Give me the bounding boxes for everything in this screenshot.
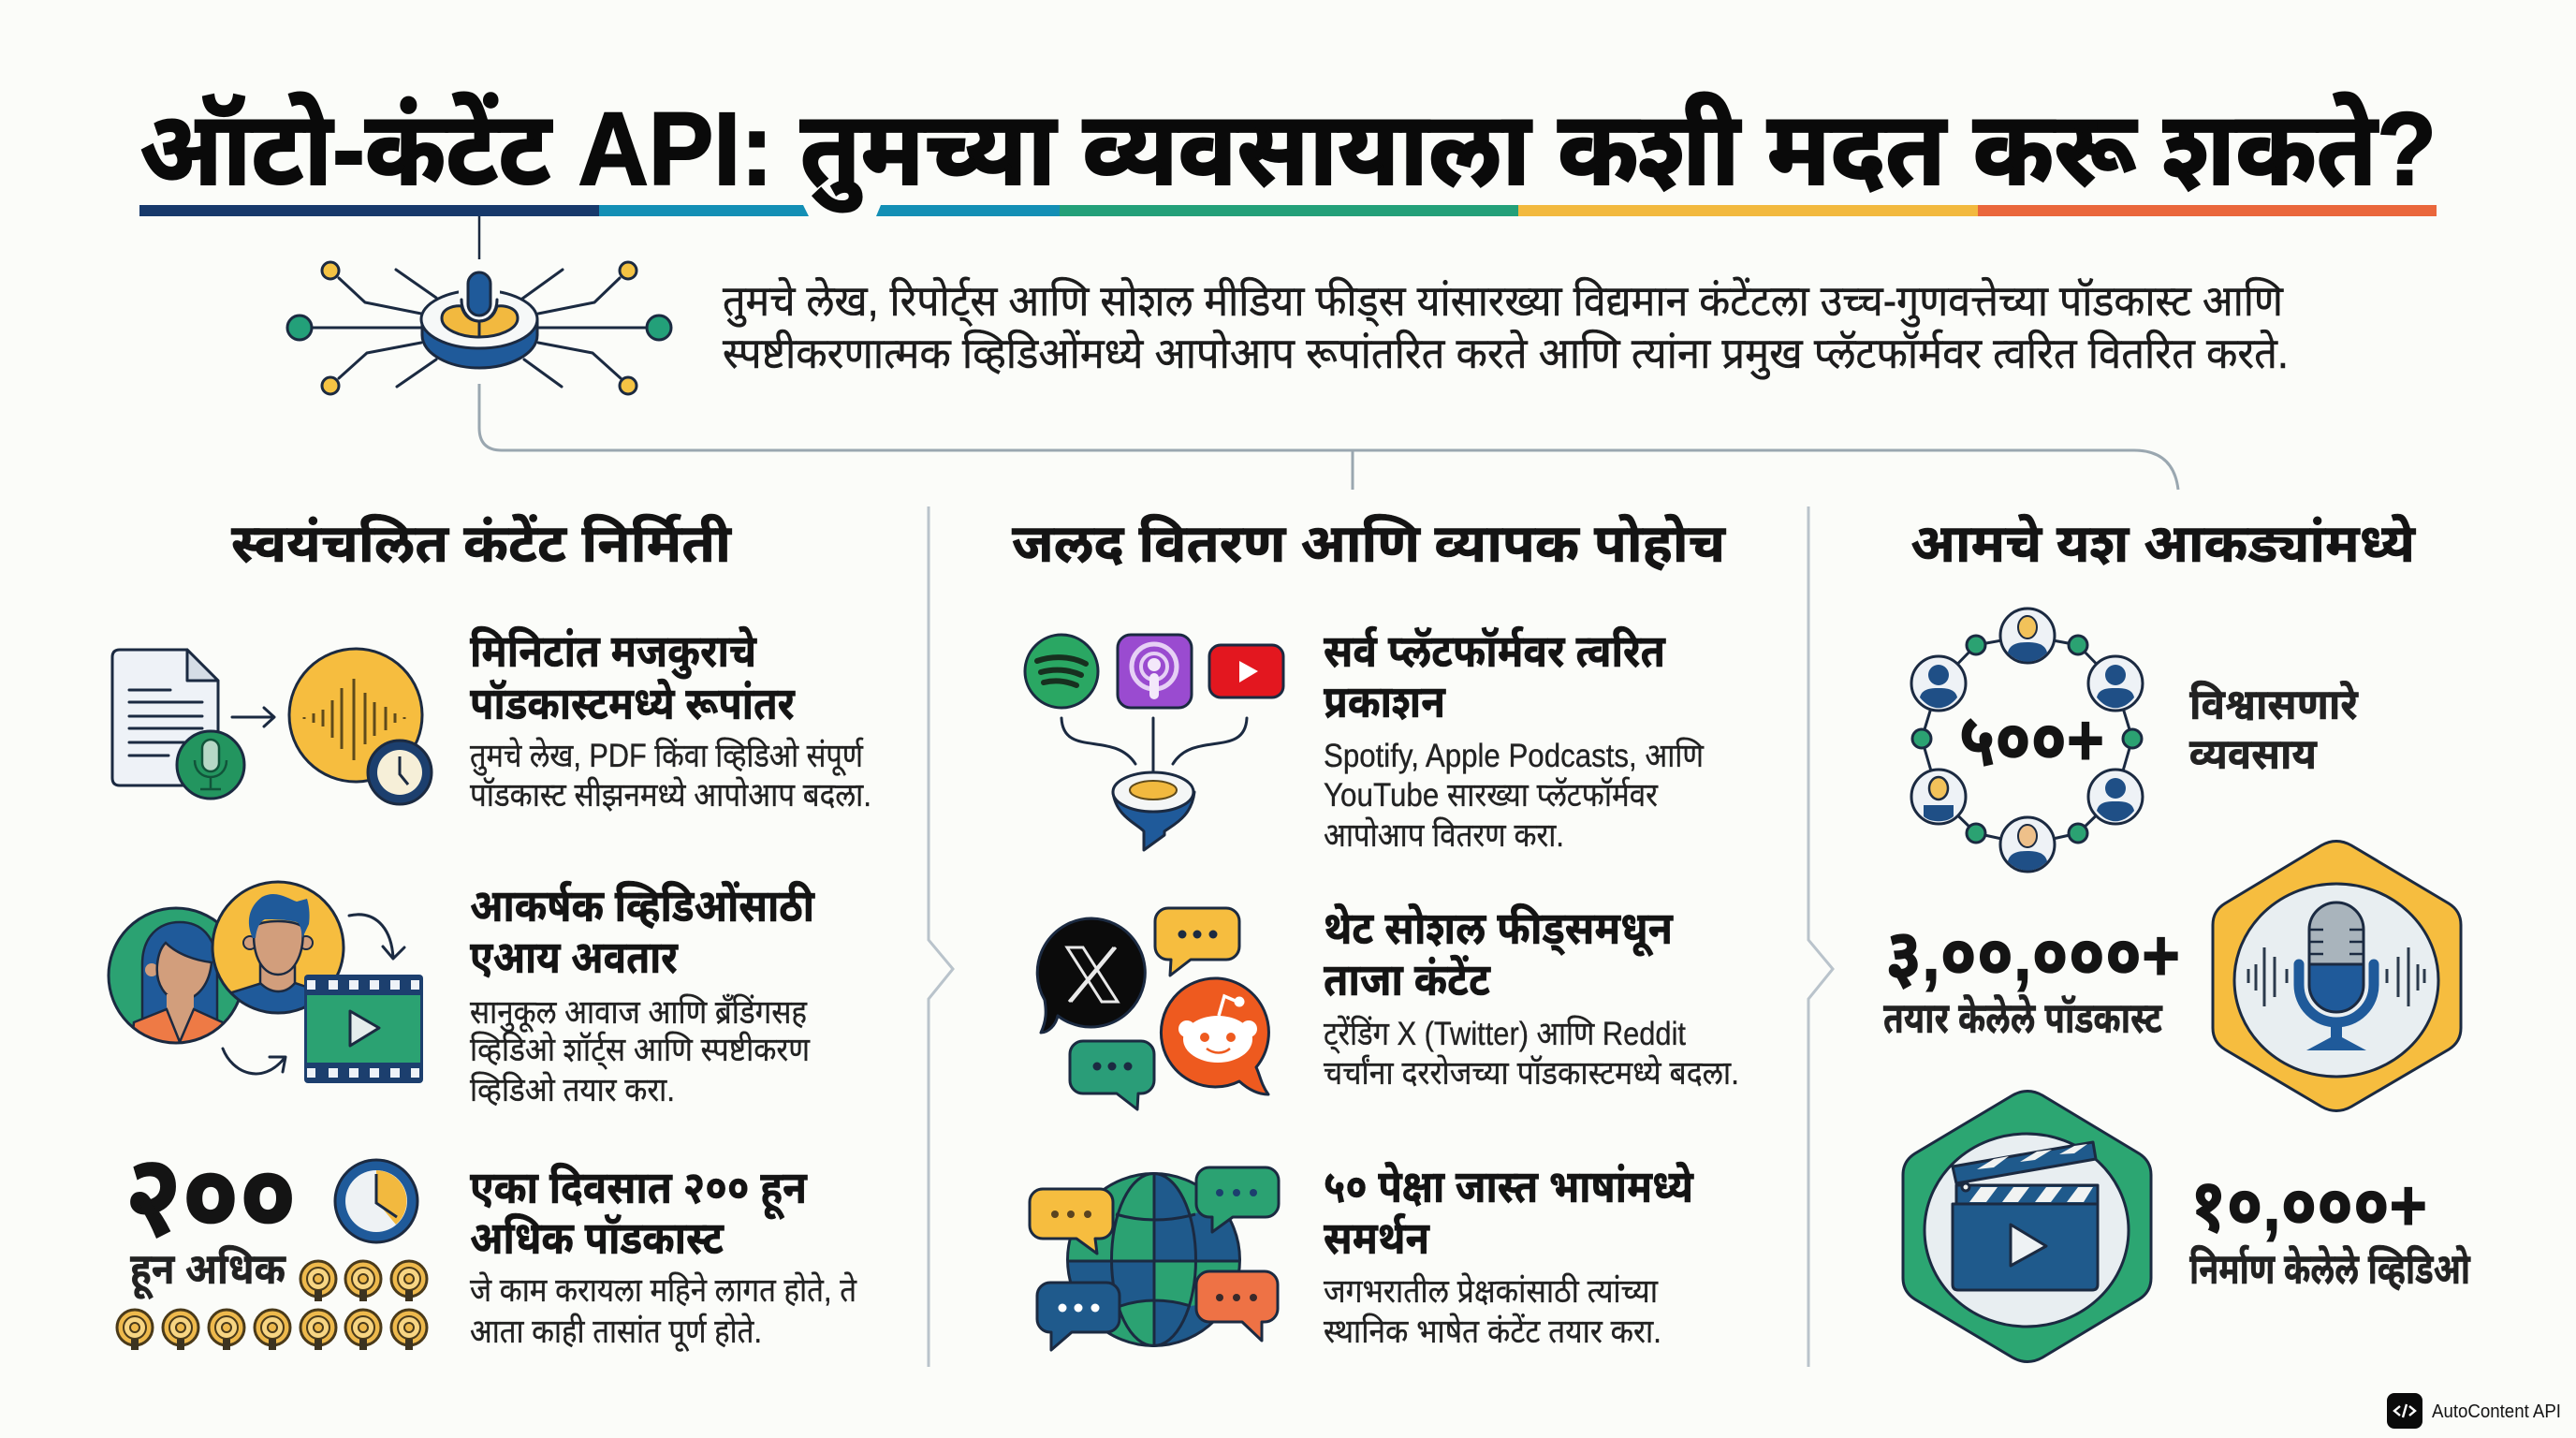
text: social feeds: ट्रेंडिंग X (Twitter) आणि Reddit [1324, 1015, 1686, 1053]
stat: 500+ businesses [1959, 679, 2359, 781]
stat: 200 plus: २०० [124, 1132, 297, 1259]
text: social feeds: थेट सोशल फीड्समधून [1324, 902, 1674, 957]
logo badge [2387, 1393, 2561, 1429]
text: publish everywhere: YouTube सारख्या प्लॅटफॉर्मवर [1324, 776, 1659, 814]
title colour bar [139, 205, 2437, 216]
text: 50 languages: जगभरातील प्रेक्षकांसाठी त्यांच्या [1324, 1272, 1659, 1310]
text: 50 languages: समर्थन [1324, 1212, 1430, 1264]
icon: globe with languages [1030, 1167, 1279, 1353]
text: AI avatars: आकर्षक व्हिडिओंसाठी [470, 880, 815, 932]
icon: AI avatars to video [109, 882, 423, 1083]
text: publish everywhere: आपोआप वितरण करा. [1324, 816, 1564, 854]
text: publish everywhere [1324, 625, 1705, 854]
stat: 10,000+ videos [2189, 1164, 2471, 1293]
text: 200 podcasts a day [470, 1163, 857, 1352]
stat: 3,00,000+ podcasts: तयार केलेले पॉडकास्ट [1883, 992, 2163, 1042]
text: 50 languages: स्थानिक भाषेत कंटेंट तयार करा. [1324, 1313, 1661, 1350]
text: AI avatars: व्हिडिओ शॉर्ट्स आणि स्पष्टीकरण [470, 1031, 811, 1069]
intro text: तुमचे लेख, रिपोर्ट्स आणि सोशल मीडिया फीड्स यांसारख्या विद्यमान कंटेंटला उच्च-गुणवत्तेच्या पॉडकास्ट आणि [723, 275, 2284, 329]
icon: social feeds [1037, 908, 1268, 1109]
stat: 10,000+ videos: १०,०००+ [2190, 1164, 2427, 1246]
column dividers [929, 506, 1833, 1367]
text: AI avatars: एआय अवतार [470, 933, 679, 983]
stat: 200 plus [117, 1132, 427, 1350]
stat: 500+ businesses: विश्वासणारे [2189, 679, 2359, 728]
stat: 500+ businesses: ५००+ [1959, 698, 2104, 781]
text: publish everywhere: सर्व प्लॅटफॉर्मवर त्वरित [1324, 625, 1666, 677]
heading: column 3: आमचे यश आकड्यांमध्ये [1910, 513, 2417, 574]
text: 200 podcasts a day: अधिक पॉडकास्ट [470, 1213, 724, 1264]
text: 50 languages: ५० पेक्षा जास्त भाषांमध्ये [1324, 1161, 1694, 1212]
text: publish everywhere: प्रकाशन [1324, 678, 1446, 727]
icon: video clapper badge [1903, 1092, 2151, 1361]
heading: column 1: स्वयंचलित कंटेंट निर्मिती [231, 513, 732, 574]
stat: 10,000+ videos: निर्माण केलेले व्हिडिओ [2189, 1243, 2471, 1293]
stat: 500+ businesses: व्यवसाय [2188, 729, 2318, 778]
icon: microphone badge [2213, 841, 2461, 1110]
stat: 3,00,000+ podcasts: ३,००,०००+ [1885, 914, 2180, 996]
panel: fast distribution [1012, 513, 1739, 1353]
text: 200 podcasts a day: जे काम करायला महिने लागत होते, ते [470, 1271, 857, 1309]
text: 50 languages [1324, 1161, 1694, 1350]
text: podcast conversion [470, 625, 871, 814]
text: AI avatars [470, 880, 815, 1108]
text: 200 podcasts a day: एका दिवसात २०० हून [470, 1163, 808, 1220]
text: social feeds [1324, 902, 1739, 1092]
text: AI avatars: व्हिडिओ तयार करा. [470, 1071, 675, 1108]
text: publish everywhere: Spotify, Apple Podcasts, आणि [1324, 737, 1705, 774]
icon: platforms into funnel [1025, 635, 1283, 850]
icon: business network ring [1911, 609, 2143, 872]
logo badge: AutoContent API [2432, 1401, 2561, 1422]
text: social feeds: ताजा कंटेंट [1324, 954, 1491, 1005]
text: podcast conversion: मिनिटांत मजकुराचे [470, 625, 757, 679]
text: 200 podcasts a day: आता काही तासांत पूर्ण होते. [470, 1313, 762, 1352]
intro text: स्पष्टीकरणात्मक व्हिडिओंमध्ये आपोआप रूपांतरित करते आणि त्यांना प्रमुख प्लॅटफॉर्मवर त्वरित वितरित करते. [723, 328, 2289, 381]
text: podcast conversion: पॉडकास्ट सीझनमध्ये आपोआप बदला. [470, 776, 871, 814]
title: ऑटो-कंटेंट API: तुमच्या व्यवसायाला कशी मदत करू शकते? [139, 91, 2437, 213]
text: podcast conversion: तुमचे लेख, PDF किंवा व्हिडिओ संपूर्ण [470, 737, 864, 776]
heading: column 2: जलद वितरण आणि व्यापक पोहोच [1012, 513, 1726, 574]
panel: success in numbers [1883, 513, 2471, 1361]
stat: 3,00,000+ podcasts [1883, 914, 2180, 1042]
text: AI avatars: सानुकूल आवाज आणि ब्रँडिंगसह [470, 993, 808, 1033]
text: podcast conversion: पॉडकास्टमध्ये रूपांतर [470, 678, 796, 729]
intro text [723, 275, 2289, 381]
icon: API hub [287, 216, 671, 394]
panel: automatic content creation [109, 513, 871, 1352]
connector bracket [479, 384, 2178, 490]
stat: 200 plus: हून अधिक [130, 1244, 286, 1299]
icon: document to podcast [112, 649, 432, 804]
text: social feeds: चर्चांना दररोजच्या पॉडकास्टमध्ये बदला. [1324, 1054, 1739, 1092]
